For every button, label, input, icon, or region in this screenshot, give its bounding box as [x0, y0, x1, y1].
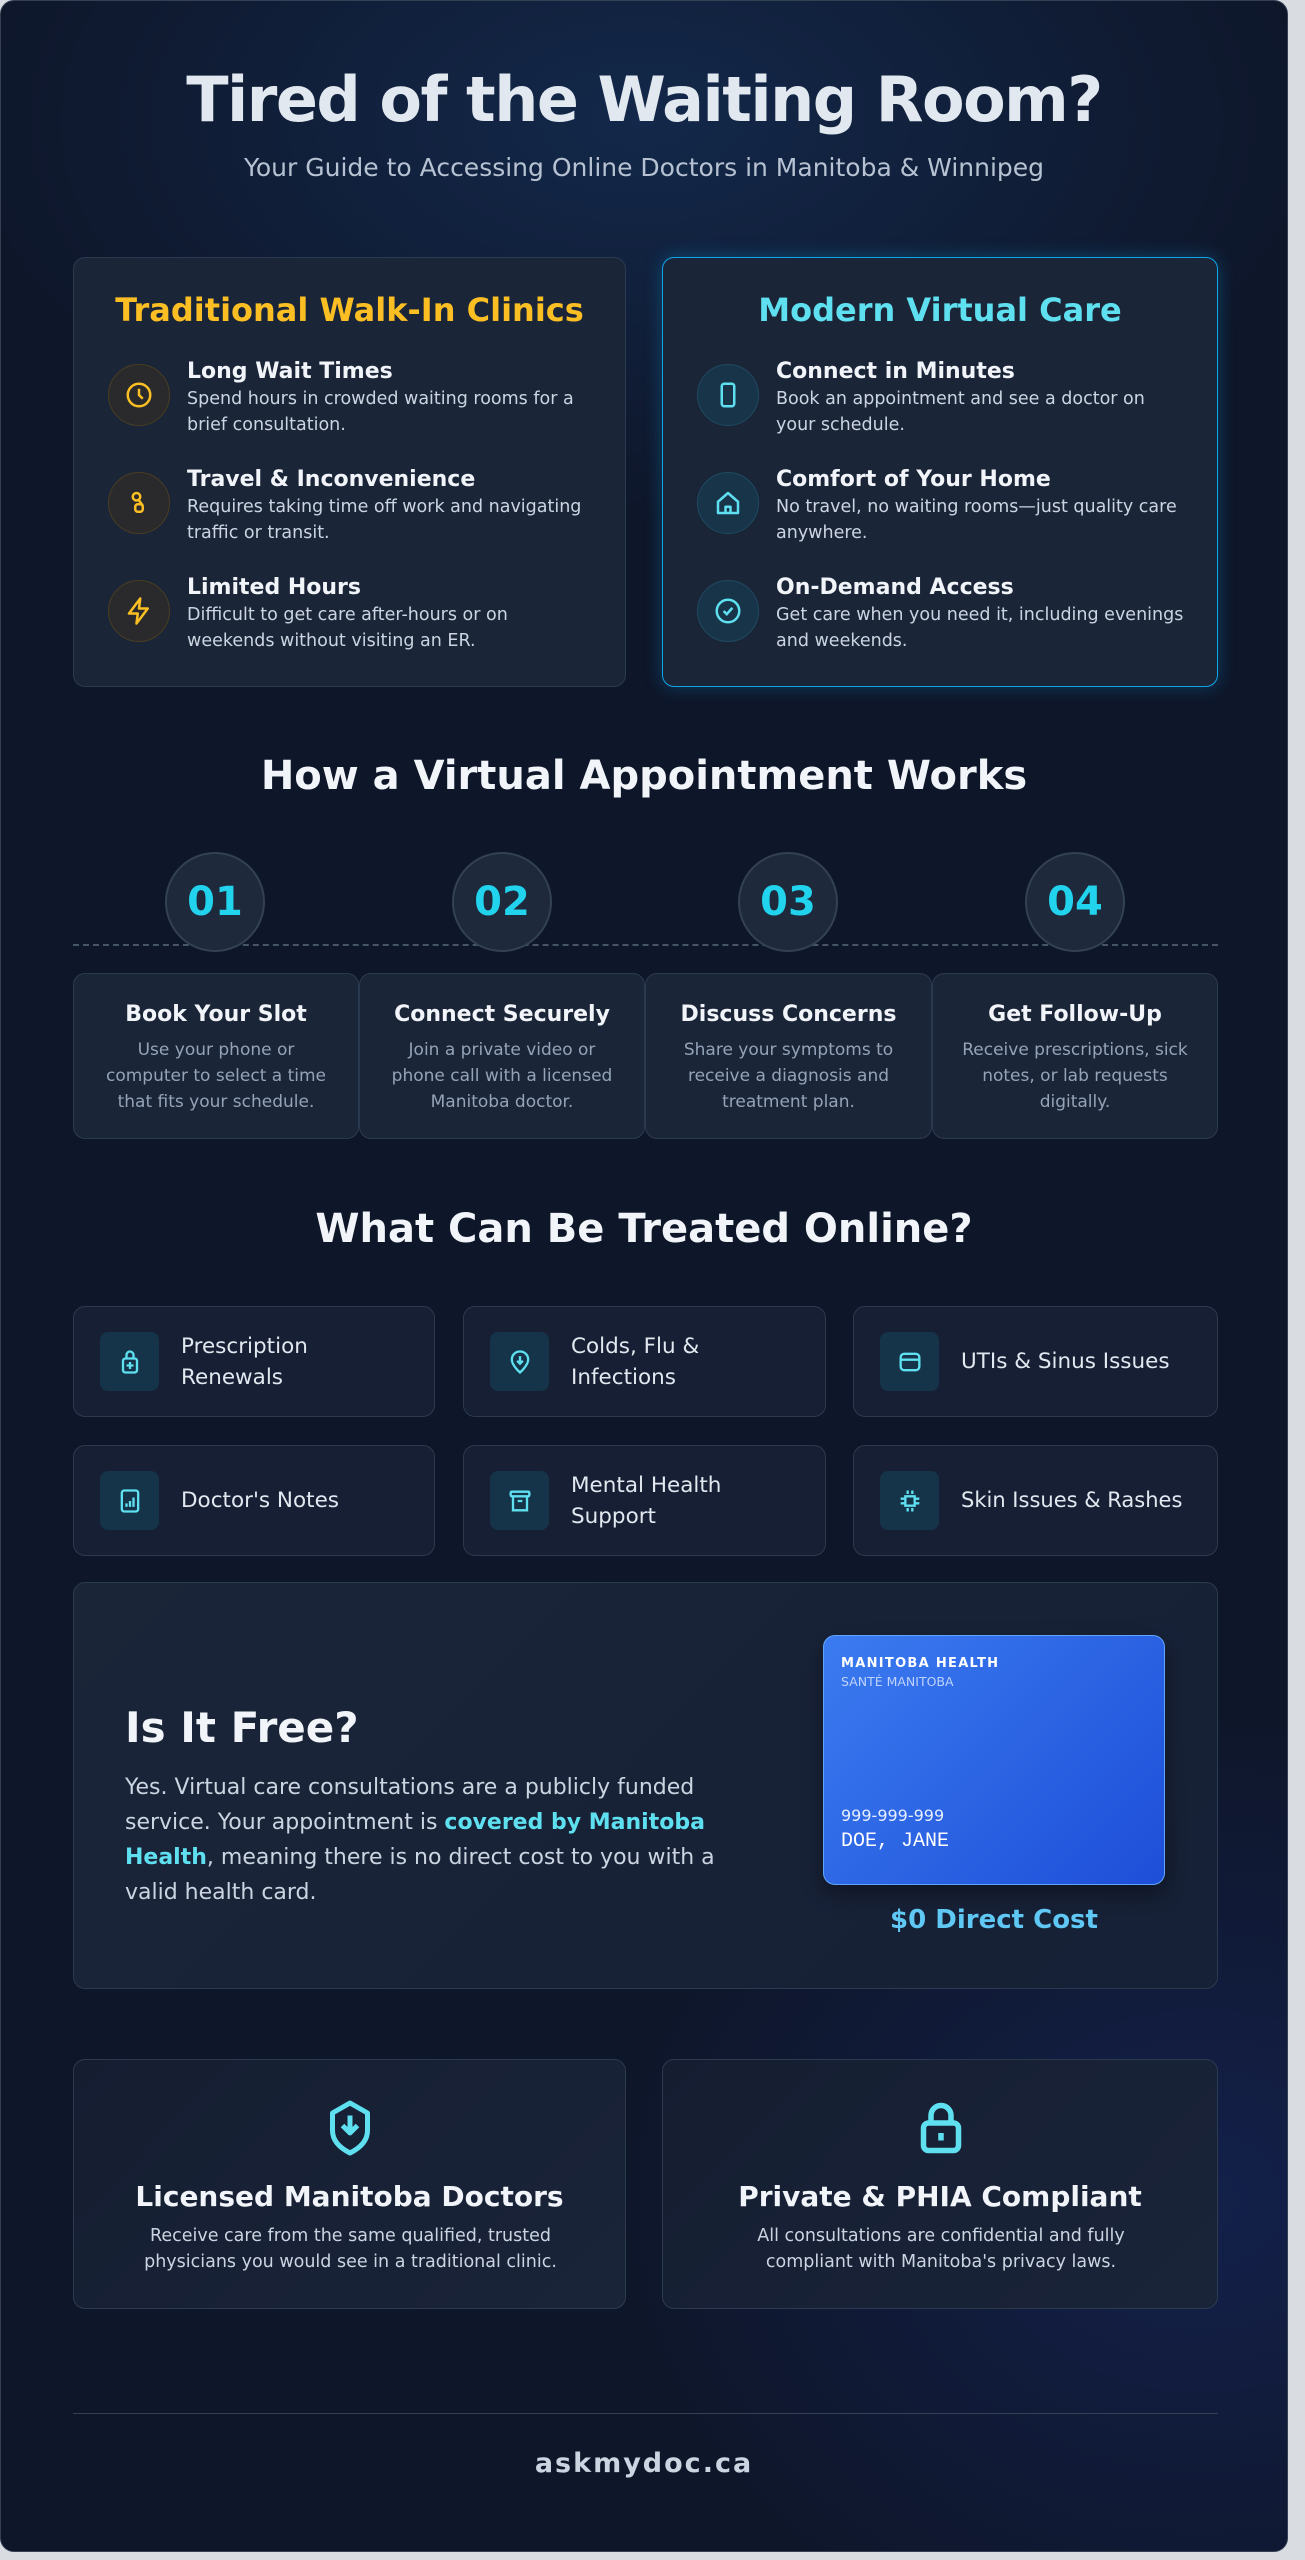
body text: Yes. Virtual care consultations are a publicly funded service. Your appointment is covered by Manitoba Health, meaning there is no direct cost to you with a valid health card. — [125, 1775, 715, 1905]
item: on-demand — [697, 575, 1183, 651]
item: limited hours: Limited Hours — [187, 575, 361, 600]
treat: prescription: Renewals — [181, 1364, 283, 1390]
item: comfort of home: No travel, no waiting rooms—just quality care anywhere. — [776, 497, 1177, 543]
health card: SANTÉ MANITOBA — [841, 1674, 954, 1689]
item: on-demand: On-Demand Access — [776, 575, 1014, 600]
step card 1: Use your phone or computer to select a time that fits your schedule. — [106, 1040, 326, 1112]
step circle 01: 01 — [187, 879, 243, 925]
title: Private & PHIA Compliant — [738, 2180, 1142, 2213]
item: limited hours: Difficult to get care after-hours or on weekends without visiting an ER. — [187, 605, 508, 651]
step circle 01 — [165, 852, 265, 952]
treat: colds: Infections — [571, 1364, 676, 1390]
health card: MANITOBA HEALTH — [841, 1656, 999, 1671]
health card: DOE, JANE — [841, 1830, 949, 1853]
panel: licensed doctors — [73, 2059, 626, 2309]
heading: how it works: How a Virtual Appointment Works — [261, 753, 1027, 799]
step card 3 — [645, 973, 932, 1139]
treat: utis — [853, 1306, 1218, 1417]
item: comfort of home: Comfort of Your Home — [776, 467, 1051, 492]
step circle 04 — [1025, 852, 1125, 952]
treat: prescription: Prescription — [181, 1334, 308, 1358]
item: travel: Travel & Inconvenience — [187, 467, 475, 492]
panel: is it free — [73, 1582, 1218, 1989]
step circle 02 — [452, 852, 552, 952]
step card 4: Receive prescriptions, sick notes, or lab requests digitally. — [962, 1040, 1188, 1112]
item: long wait times: Long Wait Times — [187, 359, 393, 384]
panel: private & phia — [662, 2059, 1218, 2309]
footer: askmydoc.ca: askmydoc.ca — [535, 2448, 753, 2479]
step card 1 — [73, 973, 359, 1139]
step card 2: Connect Securely — [394, 1002, 610, 1027]
item: comfort of home — [697, 467, 1177, 543]
item: on-demand: Get care when you need it, including evenings and weekends. — [776, 605, 1183, 651]
item: limited hours — [108, 575, 508, 651]
step card 3: Share your symptoms to receive a diagnosis and treatment plan. — [684, 1040, 893, 1112]
title: Tired of the Waiting Room? — [186, 63, 1102, 136]
treat: mental health: Support — [571, 1504, 656, 1528]
panel: traditional walk-in clinics — [73, 257, 626, 687]
step circle 04: 04 — [1047, 879, 1103, 925]
treat: doctor's notes: Doctor's Notes — [181, 1488, 339, 1513]
cost label: $0 Direct Cost — [890, 1905, 1098, 1935]
step card 1: Book Your Slot — [125, 1002, 307, 1027]
step circle 03: 03 — [760, 879, 816, 925]
treat: mental health: Mental Health — [571, 1472, 721, 1498]
panel: modern virtual care — [662, 257, 1218, 687]
step circle 02: 02 — [474, 879, 530, 925]
heading: is it free: Is It Free? — [125, 1703, 359, 1752]
step card 2: Join a private video or phone call with a licensed Manitoba doctor. — [392, 1040, 612, 1112]
item: travel — [108, 467, 581, 543]
heading: treated online: What Can Be Treated Online? — [315, 1206, 973, 1252]
item: connect in minutes: Book an appointment and see a doctor on your schedule. — [776, 389, 1145, 435]
item: long wait times: Spend hours in crowded waiting rooms for a brief consultation. — [187, 389, 574, 435]
icon: lock — [920, 2102, 962, 2154]
subtitle: Your Guide to Accessing Online Doctors in Manitoba & Winnipeg — [244, 153, 1044, 182]
step card 2 — [359, 973, 645, 1139]
health card — [823, 1635, 1165, 1885]
item: connect in minutes: Connect in Minutes — [776, 359, 1015, 384]
description: All consultations are confidential and fully compliant with Manitoba's privacy laws. — [757, 2226, 1125, 2272]
title: Licensed Manitoba Doctors — [135, 2180, 564, 2213]
treat: colds — [463, 1306, 826, 1417]
heading: virtual care: Modern Virtual Care — [758, 291, 1122, 329]
treat: doctor's notes — [73, 1445, 435, 1556]
treat: skin: Skin Issues & Rashes — [961, 1488, 1182, 1512]
step card 3: Discuss Concerns — [681, 1002, 896, 1027]
step card 4: Get Follow-Up — [988, 1002, 1162, 1027]
treat: colds: Colds, Flu & — [571, 1334, 699, 1358]
description: Receive care from the same qualified, trusted physicians you would see in a traditional clinic. — [144, 2226, 557, 2272]
treat: skin — [853, 1445, 1218, 1556]
item: travel: Requires taking time off work and navigating traffic or transit. — [187, 497, 581, 543]
step card 4 — [932, 973, 1218, 1139]
item: long wait times — [108, 359, 574, 435]
step circle 03 — [738, 852, 838, 952]
heading: traditional: Traditional Walk-In Clinics — [115, 291, 584, 329]
treat: prescription — [73, 1306, 435, 1417]
treat: mental health — [463, 1445, 826, 1556]
treat: utis: UTIs & Sinus Issues — [961, 1349, 1170, 1374]
item: connect in minutes — [697, 359, 1145, 435]
icon: shield — [330, 2100, 370, 2156]
health card: 999-999-999 — [841, 1806, 944, 1825]
